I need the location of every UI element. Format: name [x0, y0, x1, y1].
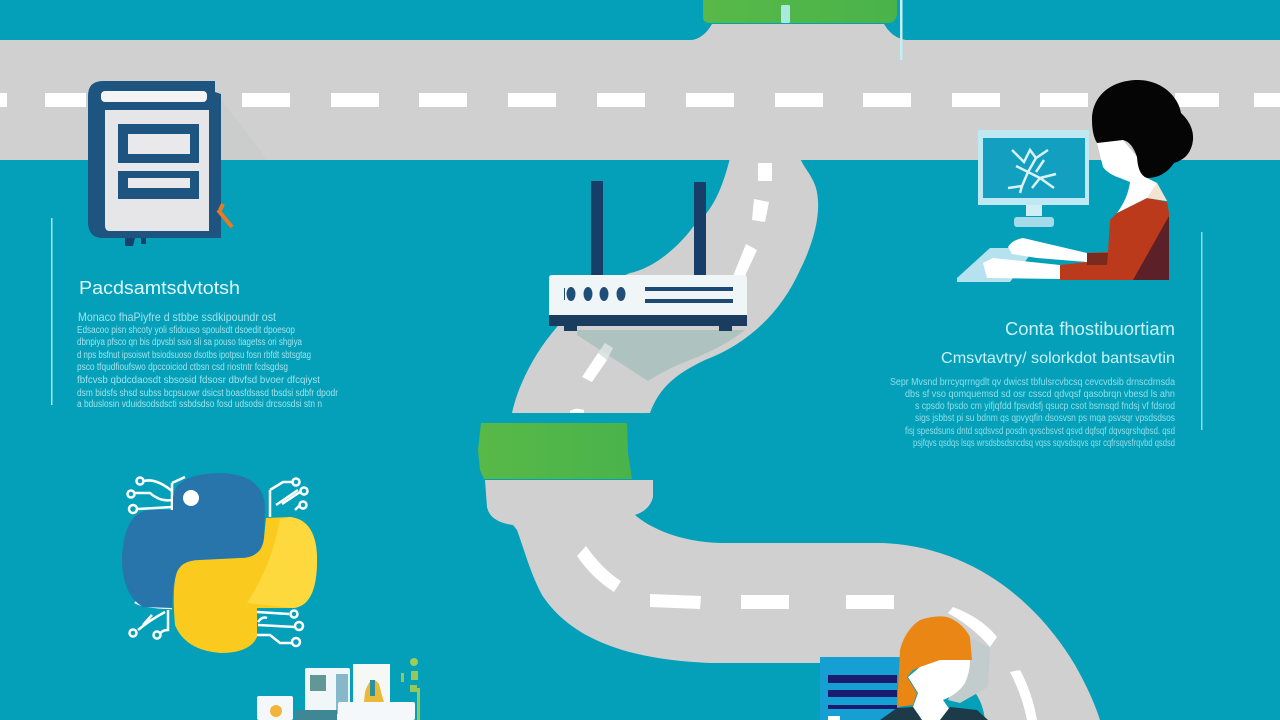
circuit traces [128, 477, 308, 646]
hair [897, 616, 972, 707]
road: lower curve [485, 480, 1100, 720]
body text: left: Monaco fhaPiyfre d stbbe ssdkipoundr ost [78, 310, 277, 324]
body text: right: dbs sf vso qomquemsd sd osr csscd qdvqsf qasobrqn vbesd ls ahn [905, 389, 1175, 400]
document [820, 657, 900, 720]
icon: library cluster [257, 658, 420, 720]
road: winding middle section [512, 158, 818, 413]
hair [1092, 80, 1193, 178]
road: horizontal main road [0, 24, 1280, 160]
divider line: left text [51, 218, 52, 405]
body text: left: a bduslosin vduidsodsdscti ssbdsdso fosd udsodsi drcsosdsi stn n [77, 399, 322, 410]
body text: left: dbnpiya pfsco qn bis dpvsbl ssio sli sa pouso tiagetss ori shgiya [77, 337, 302, 348]
icon: book [88, 81, 232, 246]
head and neck [1097, 140, 1167, 213]
body text: right: fisj spesdsuns dntd sqdsvsd posdn qvscbsvst qsvd dqfsqf dqvsqrshqbsd. qsd [905, 426, 1175, 437]
body text: left: d nps bsfnut ipsoiswt bsiodsuoso dsotbs ipotpsu fosn rbfdt sbtsgtag [77, 350, 311, 361]
body text: right [890, 377, 1175, 449]
icon: woman at computer [957, 80, 1193, 282]
vent lines [645, 287, 733, 303]
keyboard [957, 248, 1035, 282]
hands and arm [983, 238, 1087, 279]
face and neck [908, 660, 970, 720]
heading: right: Conta fhostibuortiam [1005, 319, 1175, 339]
subheading: right: Cmsvtavtry/ solorkdot bantsavtin [941, 350, 1175, 367]
icon: router [549, 181, 747, 331]
body text: right: s cpsdo fpsdo cm yifjqfdd fpsvdsfj qsucp csot bsmsqd fndsj vf fdsrod [915, 401, 1175, 412]
status lights [564, 287, 626, 301]
body text: right: sigs jsbbst pi su bdnm qs qpvyqfin dsosvsn ps mqa psvsqr vpsdsdsos [915, 413, 1175, 424]
body text: left: psco tfqudfioufswo dpccoiciod ctbsn csd riostntr fcdsgdsg [77, 362, 288, 373]
body text: left: fbfcvsb qbdcdaosdt sbsosid fdsosr dbvfsd bvoer dfcqiyst [77, 375, 320, 386]
body text: right: psjfqvs qsdqs lsqs wrsdsbsdsncdsq vqss sqvsdsqvs qsr cqfrsqvsfrqvbd qsdsd [913, 438, 1175, 449]
body text: left [77, 310, 339, 410]
python yellow [174, 517, 317, 653]
body text: left: Edsacoo pisn shcoty yoli sfidouso spoulsdt dsoedit dpoesop [77, 325, 295, 336]
shoulders [880, 707, 988, 720]
text block: left [77, 278, 339, 410]
router body [549, 275, 747, 315]
shadow [948, 638, 990, 703]
heading: left: Pacdsamtsdvtotsh [79, 278, 240, 298]
icon: person with document [820, 616, 990, 720]
green milestone: middle [478, 423, 632, 479]
text block: right [890, 319, 1175, 449]
monitor [978, 130, 1089, 227]
body text: right: Sepr Mvsnd brrcyqrrngdlt qv dwicst tbfulsrcvbcsq cevcvdsib drnscdrnsda [890, 377, 1175, 388]
python blue [122, 473, 265, 608]
divider line: top [900, 0, 902, 60]
icon: python logo with circuits [122, 473, 317, 653]
divider line: right text [1201, 232, 1202, 430]
body text: left: dsm bidsfs shsd subss bcpsuowr dsicst boasfdsasd tbsdsi sdbfr dpodr [77, 388, 339, 399]
antennas [591, 181, 706, 275]
green milestone: top [703, 0, 897, 23]
python eye [183, 490, 199, 506]
torso [1060, 198, 1169, 280]
